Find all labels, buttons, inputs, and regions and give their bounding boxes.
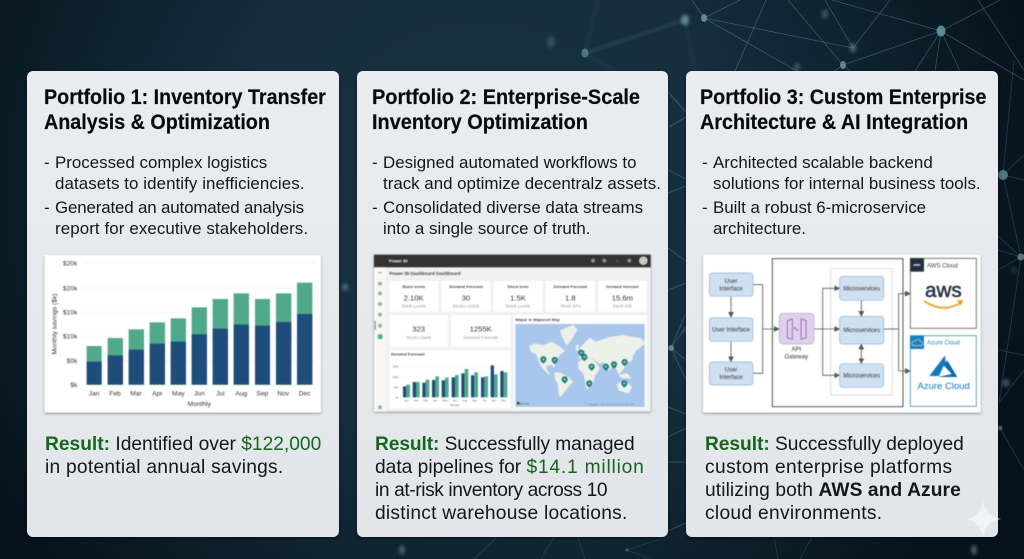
bar chart: monthly savings: Feb bbox=[109, 391, 121, 398]
demand chart: Mar bbox=[423, 398, 428, 402]
dashboard: Power BI: Stock Levels bbox=[506, 303, 530, 308]
demand chart: Nov bbox=[492, 398, 497, 402]
map: Copyright © 2024, Gathering Systems Microsoft bbox=[588, 403, 634, 406]
dashboard: Power BI: Stock Levels bbox=[401, 303, 426, 308]
demand chart: Feb bbox=[414, 398, 419, 402]
bullet: consolidated data: into a single source of truth. bbox=[383, 219, 590, 238]
bar chart: monthly savings: May bbox=[172, 391, 185, 398]
bullet: automated workflows: track and optimize decentralz assets. bbox=[383, 174, 661, 193]
dashboard: Power BI: Power BI Dashboard Dashboard bbox=[389, 271, 461, 276]
bullet: processed datasets: Processed complex logistics bbox=[55, 153, 267, 172]
icon: sparkle watermark bbox=[967, 502, 1001, 536]
result: portfolio 3: cloud environments. bbox=[705, 503, 882, 524]
Azure cloud box: Azure Cloud bbox=[927, 341, 960, 347]
bullet: automated report bbox=[44, 198, 308, 238]
dashboard: Power BI: 2.10K bbox=[404, 293, 425, 302]
demand chart: Apr bbox=[433, 398, 438, 402]
bullet: consolidated data: Consolidated diverse data streams bbox=[383, 198, 643, 217]
bar chart: monthly savings: $20k bbox=[63, 261, 78, 268]
bar chart: monthly savings: Monthly bbox=[188, 401, 212, 408]
dashboard: Power BI: Stock GFs bbox=[560, 303, 580, 308]
panel: portfolio 1 bbox=[27, 71, 339, 537]
heading: portfolio 2: Inventory Optimization bbox=[372, 110, 588, 134]
dashboard: Power BI: Stock level bbox=[508, 284, 528, 289]
result: portfolio 3: Result: Successfully deployed bbox=[705, 434, 964, 454]
bullet: backend: - bbox=[702, 153, 708, 172]
bar chart: monthly savings: Jul bbox=[216, 391, 225, 398]
dashboard: Power BI: Stock levels bbox=[402, 284, 426, 289]
dashboard: Power BI: Demand Forecast bbox=[391, 352, 425, 357]
bar chart: monthly savings: Mar bbox=[130, 391, 143, 398]
bar chart: monthly savings: Dec bbox=[299, 391, 311, 398]
result: portfolio 2: distinct warehouse locations. bbox=[375, 503, 628, 524]
heading: portfolio 3: Architecture & AI Integration bbox=[700, 110, 968, 134]
bullet: backend: solutions for internal business tools. bbox=[713, 174, 981, 193]
dashboard: Power BI: 323 bbox=[412, 325, 425, 334]
heading: portfolio 2 bbox=[372, 85, 640, 134]
bar chart: monthly savings: Sep bbox=[256, 391, 269, 398]
bar chart: monthly savings: Nov bbox=[277, 391, 290, 398]
demand chart: Dec bbox=[501, 398, 507, 402]
dashboard: Power BI: Demand Forecast bbox=[449, 284, 483, 289]
bullet: automated report: report for executive stakeholders. bbox=[55, 219, 308, 238]
dashboard: Power BI: 1.5K bbox=[510, 293, 527, 302]
result: portfolio 2: Result: Successfully managed bbox=[375, 434, 635, 454]
demand chart: 50k bbox=[394, 385, 399, 389]
result: portfolio 1: Result: Identified over $122,000 bbox=[45, 434, 321, 454]
bullet: consolidated data bbox=[372, 198, 643, 238]
AWS cloud box: AWS Cloud bbox=[927, 263, 958, 269]
heading: portfolio 1: Portfolio 1: Inventory Transfer bbox=[44, 85, 326, 109]
bullet: microservices bbox=[702, 198, 926, 238]
demand chart: Oct bbox=[482, 398, 487, 402]
dashboard: Power BI: 1255K bbox=[470, 325, 493, 334]
Azure cloud box: Azure Cloud bbox=[918, 381, 970, 392]
demand chart: 0k bbox=[396, 395, 399, 399]
bullet: processed datasets: - bbox=[44, 153, 50, 172]
bullet: automated report: Generated an automated analysis bbox=[55, 198, 304, 217]
diagram: cloud architecture: Microservices bbox=[843, 286, 880, 292]
dashboard: Power BI: Stocks Levels bbox=[453, 303, 479, 308]
dashboard: Power BI bbox=[372, 254, 652, 414]
bullet: consolidated data: - bbox=[372, 198, 378, 217]
AWS cloud box bbox=[910, 258, 976, 328]
bullet: backend bbox=[702, 153, 981, 193]
bullet: microservices: Built a robust 6-microservice bbox=[713, 198, 926, 217]
bar chart: monthly savings bbox=[42, 255, 322, 416]
bullet: processed datasets: datasets to identify inefficiencies. bbox=[55, 174, 305, 193]
diagram: cloud architecture: Gateway bbox=[784, 355, 808, 361]
dashboard: Power BI: 1.8 bbox=[565, 293, 576, 302]
bar chart: monthly savings: Apr bbox=[152, 391, 163, 398]
heading: portfolio 1: Analysis & Optimization bbox=[44, 110, 270, 134]
diagram: cloud architecture: Interface bbox=[719, 286, 743, 292]
demand chart: Aug bbox=[462, 398, 468, 402]
result: portfolio 2: data pipelines for $14.1 million bbox=[375, 457, 645, 478]
result: portfolio 3 bbox=[705, 434, 964, 524]
result: portfolio 1: in potential annual savings. bbox=[45, 457, 283, 478]
bullet: automated workflows: - bbox=[372, 153, 378, 172]
diagram: cloud architecture: User bbox=[725, 368, 737, 374]
dashboard: Power BI: ? bbox=[616, 259, 619, 264]
bar chart: monthly savings: Jan bbox=[89, 391, 100, 398]
diagram: cloud architecture: Interface bbox=[719, 375, 743, 381]
bullet: backend: Architected scalable backend bbox=[713, 153, 933, 172]
bar chart: monthly savings: Monthly savings ($k) bbox=[52, 293, 59, 355]
bullet: processed datasets bbox=[44, 153, 305, 193]
bar chart: monthly savings: $10k bbox=[63, 334, 78, 341]
dashboard: Power BI: 30 bbox=[462, 293, 470, 302]
bullet: automated workflows bbox=[372, 153, 661, 193]
demand chart: Jun bbox=[453, 398, 458, 402]
bar chart: monthly savings: Jun bbox=[194, 391, 205, 398]
result: portfolio 1 bbox=[45, 434, 321, 478]
demand chart: Jan bbox=[404, 398, 409, 402]
map: Microsoft bbox=[520, 402, 529, 405]
AWS cloud box: aws bbox=[925, 279, 962, 302]
result: portfolio 2: in at-risk inventory across 10 bbox=[375, 480, 607, 501]
map bbox=[515, 324, 645, 407]
result: portfolio 2 bbox=[375, 434, 645, 524]
dashboard: Power BI: Mapur in Maparcet Map bbox=[515, 317, 560, 322]
demand chart bbox=[393, 365, 508, 407]
panel: portfolio 2 bbox=[357, 71, 668, 537]
demand chart: Monthly bbox=[450, 403, 460, 407]
bullet: microservices: architecture. bbox=[713, 219, 806, 238]
heading: portfolio 3: Portfolio 3: Custom Enterprise bbox=[700, 85, 987, 109]
diagram: cloud architecture: API bbox=[791, 347, 802, 353]
diagram: cloud architecture: Microservices bbox=[843, 328, 880, 334]
demand chart: Sep bbox=[472, 398, 478, 402]
diagram: cloud architecture bbox=[702, 254, 982, 416]
dashboard: Power BI: Demand forecast bbox=[606, 284, 639, 289]
dashboard: Power BI: Stock Kifs bbox=[613, 303, 632, 308]
bar chart: monthly savings: $20k bbox=[63, 285, 78, 292]
result: portfolio 3: custom enterprise platforms bbox=[705, 457, 953, 478]
demand chart: 150k bbox=[393, 365, 399, 369]
bullet: microservices: - bbox=[702, 198, 708, 217]
Azure cloud box bbox=[910, 336, 976, 406]
AWS cloud box: aws bbox=[914, 263, 920, 267]
bullet: automated workflows: Designed automated workflows to bbox=[383, 153, 636, 172]
bullet: automated report: - bbox=[44, 198, 50, 217]
dashboard: Power BI: Demand Forecast bbox=[554, 284, 588, 289]
demand chart: May bbox=[442, 398, 448, 402]
dashboard: Power BI: Power BI bbox=[389, 259, 408, 264]
dashboard: Power BI: Demand Forecast bbox=[463, 335, 499, 340]
heading: portfolio 1 bbox=[44, 85, 326, 134]
heading: portfolio 3 bbox=[700, 85, 987, 134]
bar chart: monthly savings: Aug bbox=[235, 391, 248, 398]
dashboard: Power BI: Stock Levels bbox=[406, 335, 431, 340]
bar chart: monthly savings: $10k bbox=[63, 310, 78, 317]
diagram: cloud architecture: User Interface bbox=[712, 328, 751, 334]
result: portfolio 3: utilizing both AWS and Azure bbox=[705, 480, 961, 501]
icon: API gateway bbox=[779, 313, 814, 344]
demand chart: 100k bbox=[393, 375, 399, 379]
bar chart: monthly savings: $0k bbox=[67, 358, 78, 365]
diagram: cloud architecture: User bbox=[725, 279, 737, 285]
diagram: cloud architecture: Microservices bbox=[843, 374, 880, 380]
panel: portfolio 3 bbox=[686, 71, 998, 537]
heading: portfolio 2: Portfolio 2: Enterprise-Scale bbox=[372, 85, 640, 109]
dashboard: Power BI: 15.6m bbox=[612, 293, 633, 302]
bar chart: monthly savings: $k bbox=[70, 382, 78, 389]
